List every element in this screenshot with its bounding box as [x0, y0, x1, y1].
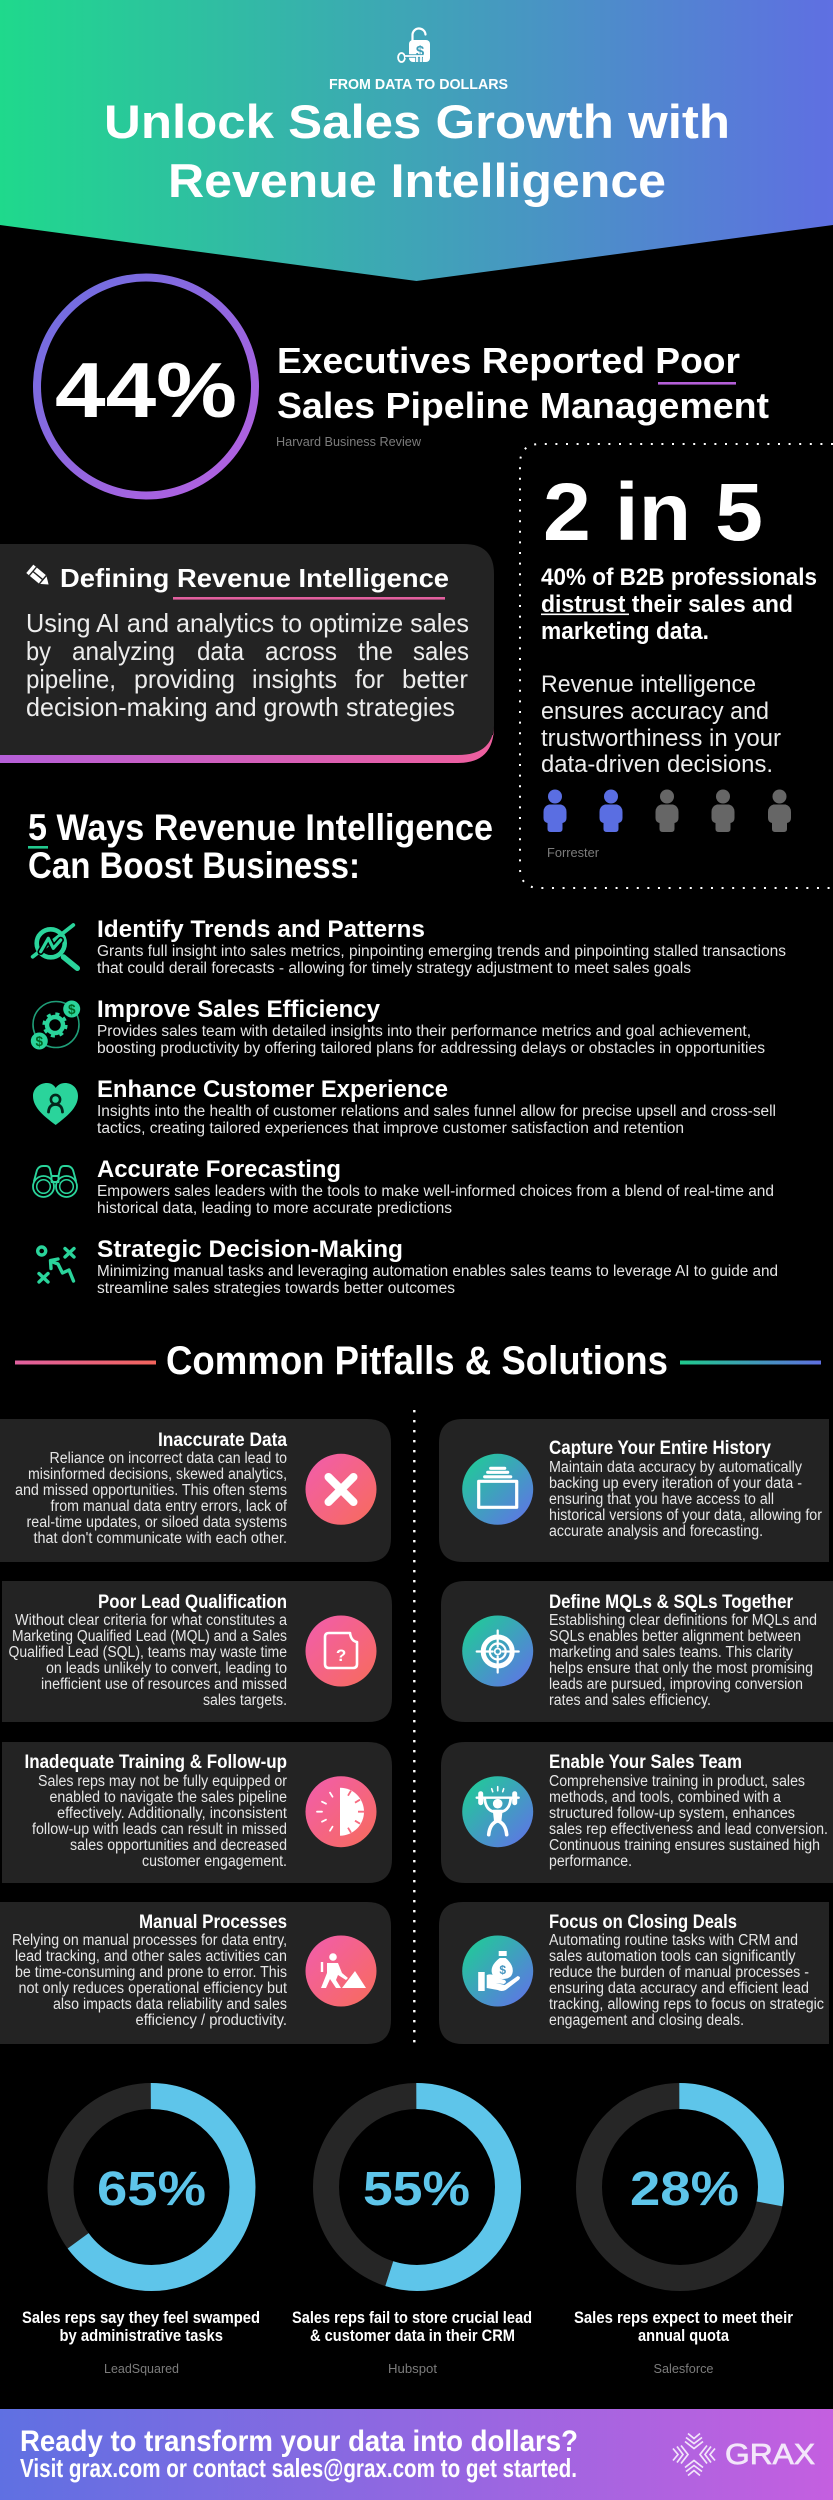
logo: GRAX: GRAX	[725, 2439, 815, 2471]
panel: pitfall inadequate training: customer engagement.	[142, 1853, 287, 1870]
panel: pitfall inadequate training: effectively. Additionally, inconsistent	[57, 1805, 288, 1822]
call to action: Ready to transform your data into dollars?	[20, 2425, 578, 2458]
icon: people pictogram 2 of 5	[544, 790, 791, 832]
icon: worker digging	[306, 1936, 376, 2006]
definition text: Using AI and analytics to optimize sales	[26, 608, 469, 638]
explanation text	[541, 671, 781, 778]
icon: lock and key	[398, 28, 430, 62]
item: sales efficiency	[31, 996, 765, 1057]
chart: donut 28 percent: 28%	[630, 2163, 739, 2216]
item: identify trends: Grants full insight into sales metrics, pinpointing emerging trends and pinpointing stalled transactions	[97, 943, 786, 960]
logo: GRAX	[673, 2434, 815, 2476]
item: forecasting: Empowers sales leaders with the tools to make well-informed choices from a blend of real-time and	[97, 1183, 774, 1200]
definition text: decision-making and growth strategies	[26, 692, 455, 722]
chart: donut 28 percent	[574, 2096, 794, 2376]
icon: target	[462, 1616, 533, 1686]
item: forecasting: Accurate Forecasting	[97, 1156, 341, 1183]
icon: binoculars	[33, 1166, 77, 1197]
panel: pitfall inaccurate data: and missed opportunities. This often stems	[15, 1482, 287, 1499]
chart: donut 55 percent: Sales reps fail to store crucial lead	[292, 2309, 532, 2327]
panel: solution define MQLs and SQLs: marketing and sales teams. This clarity	[549, 1644, 793, 1661]
heading: common pitfalls: Common Pitfalls & Solutions	[166, 1339, 668, 1383]
definition text: analyzing	[72, 636, 175, 666]
item: strategic decisions: Minimizing manual tasks and leveraging automation enables sales teams to leverage AI to guide and	[97, 1263, 778, 1280]
icon: gear with dollar coins: $	[36, 1034, 44, 1049]
icon: document question	[306, 1616, 376, 1686]
title: Revenue Intelligence	[168, 154, 666, 207]
panel: pitfall inaccurate data: from manual data entry errors, lack of	[50, 1498, 288, 1515]
list: 5 ways	[31, 916, 786, 1297]
footer banner	[0, 2409, 833, 2500]
chart: donut 55 percent: & customer data in their CRM	[310, 2327, 515, 2345]
panel: pitfall inaccurate data: Reliance on incorrect data can lead to	[50, 1450, 287, 1467]
panel: solution enable sales team: Comprehensive training in product, sales	[549, 1773, 805, 1790]
chart: donut 28 percent: Salesforce	[654, 2361, 714, 2376]
chart: donut 55 percent: 55%	[363, 2163, 470, 2216]
panel: pitfall inadequate training	[2, 1742, 392, 1883]
icon: money bag in hand: $	[499, 1963, 506, 1977]
stat text: 40% of B2B professionals	[541, 564, 817, 591]
item: identify trends: Identify Trends and Patterns	[97, 916, 425, 943]
panel: solution enable sales team: methods, and tools, combined with a	[549, 1789, 781, 1806]
icon: half clock	[306, 1776, 376, 1847]
call to action: Visit grax.com or contact sales@grax.com to get started.	[20, 2453, 577, 2483]
call to action	[20, 2425, 578, 2483]
panel: pitfall lead qualification: inefficient use of resources and missed	[41, 1676, 287, 1693]
panel: solution capture history: ensuring that you have access to all	[549, 1491, 774, 1508]
panel: solution closing deals: ensuring data accuracy and efficient lead	[549, 1980, 809, 1997]
definition text: for	[355, 664, 384, 694]
panel: solution enable sales team: performance.	[549, 1853, 632, 1870]
explanation text: data-driven decisions.	[541, 751, 773, 778]
panel: solution closing deals: Focus on Closing Deals	[549, 1911, 737, 1933]
definition text: by	[26, 636, 51, 666]
stat: 44 percent ring	[37, 278, 255, 496]
panel: pitfall manual processes: not only reduces operational efficiency but	[18, 1980, 288, 1997]
stat heading: executives: Sales Pipeline Management	[277, 385, 769, 426]
panel: pitfall manual processes: also impacts data reliability and sales	[53, 1996, 287, 2013]
panel: pitfall manual processes: Manual Processes	[139, 1911, 287, 1933]
stat text: distrust their sales and	[541, 591, 793, 618]
item: identify trends	[33, 916, 786, 977]
item: sales efficiency: boosting productivity by offering tailored plans for addressing delays or obstacles in opportunities	[97, 1040, 765, 1057]
panel: solution define MQLs and SQLs	[441, 1581, 833, 1722]
panel: pitfall manual processes	[0, 1902, 391, 2044]
chart: donut 28 percent: annual quota	[638, 2327, 730, 2345]
panel: solution enable sales team: Enable Your Sales Team	[549, 1751, 742, 1773]
title: Unlock Sales Growth with	[104, 95, 730, 148]
title	[104, 95, 730, 207]
icon: gear with dollar coins: $	[68, 1002, 76, 1017]
panel: pitfall manual processes: efficiency / productivity.	[136, 2012, 287, 2029]
panel: solution enable sales team	[441, 1742, 833, 1883]
definition text: across	[265, 636, 337, 666]
stat heading: executives: Executives Reported Poor	[277, 340, 740, 381]
panel: solution define MQLs and SQLs: SQLs enables better alignment between	[549, 1628, 801, 1645]
chart: donut 55 percent	[292, 2096, 532, 2376]
panel: pitfall lead qualification: Without clear criteria for what constitutes a	[15, 1612, 287, 1629]
explanation text: Revenue intelligence	[541, 671, 756, 698]
eyebrow: FROM DATA TO DOLLARS	[329, 76, 508, 93]
definition text: better	[402, 664, 468, 694]
icon: pencil	[26, 565, 52, 589]
chart: donut 65 percent: Sales reps say they feel swamped	[22, 2309, 260, 2327]
panel: pitfall inaccurate data: that don't communicate with each other.	[34, 1530, 287, 1547]
panel: solution enable sales team: structured follow-up system, enhances	[549, 1805, 795, 1822]
panel: pitfall inadequate training: Sales reps may not be fully equipped or	[38, 1773, 287, 1790]
panel: solution closing deals: reduce the burden of manual processes -	[549, 1964, 809, 1981]
panel: solution define MQLs and SQLs: leads are pursued, improving conversion	[549, 1676, 803, 1693]
panel: solution capture history	[439, 1419, 829, 1562]
definition text	[26, 608, 469, 722]
icon: weightlifter	[462, 1776, 533, 1847]
heading: 5 ways: 5 Ways Revenue Intelligence	[28, 807, 493, 848]
panel: pitfall lead qualification: Qualified Lead (SQL), teams may waste time	[8, 1644, 287, 1661]
chart: donut 65 percent: LeadSquared	[104, 2361, 179, 2376]
panel: solution capture history: accurate analysis and forecasting.	[549, 1523, 763, 1540]
icon: heart with person	[33, 1083, 78, 1125]
panel heading: Defining Revenue Intelligence	[60, 563, 449, 593]
panel: pitfall inadequate training: sales opportunities and decreased	[70, 1837, 287, 1854]
stat heading: executives	[276, 340, 769, 449]
item: forecasting	[33, 1156, 774, 1217]
icon: document question: ?	[336, 1646, 346, 1665]
panel: solution define MQLs and SQLs: rates and sales efficiency.	[549, 1692, 711, 1709]
panel: 2 in 5	[520, 444, 833, 888]
item: customer experience: tactics, creating tailored experiences that improve customer satisfaction and retention	[97, 1120, 684, 1137]
panel: solution closing deals: sales automation tools can significantly	[549, 1948, 796, 1965]
chart: donut 55 percent: Hubspot	[388, 2361, 437, 2376]
stat text: marketing data.	[541, 618, 709, 645]
definition text: insights	[252, 664, 337, 694]
panel: pitfall inaccurate data	[0, 1419, 391, 1562]
icon: money bag in hand	[462, 1936, 533, 2006]
item: strategic decisions: Strategic Decision-Making	[97, 1236, 403, 1263]
panel: solution closing deals: engagement and closing deals.	[549, 2012, 744, 2029]
item: strategic decisions	[38, 1236, 778, 1297]
panel: solution capture history: backing up every iteration of your data -	[549, 1475, 802, 1492]
item: customer experience: Insights into the health of customer relations and sales funnel allow for precise upsell and cross-sell	[97, 1103, 776, 1120]
panel: pitfall manual processes: Relying on manual processes for data entry,	[12, 1932, 287, 1949]
stat: 44 percent ring: 44%	[55, 346, 237, 434]
panel: pitfall inadequate training: enabled to navigate the sales pipeline	[50, 1789, 287, 1806]
panel: pitfall lead qualification: Poor Lead Qualification	[98, 1591, 287, 1613]
panel: 2 in 5: Forrester	[547, 845, 600, 860]
panel: solution define MQLs and SQLs: helps ensure that only the most promising	[549, 1660, 813, 1677]
icon: play diagram	[38, 1247, 74, 1282]
panel: pitfall lead qualification	[2, 1581, 392, 1722]
panel: solution capture history: Maintain data accuracy by automatically	[549, 1459, 802, 1476]
heading: 5 ways	[28, 807, 493, 886]
icon: lock and key: $	[416, 43, 425, 60]
definition text: sales	[413, 636, 469, 666]
panel: defining revenue intelligence	[0, 544, 494, 763]
header banner	[0, 0, 833, 281]
panel: pitfall lead qualification: sales targets.	[203, 1692, 287, 1709]
panel: pitfall lead qualification: on leads unlikely to convert, leading to	[46, 1660, 287, 1677]
item: customer experience	[33, 1076, 776, 1137]
panel: pitfall inaccurate data: Inaccurate Data	[158, 1429, 287, 1451]
panel: pitfall manual processes: lead tracking, and other sales activities can	[15, 1948, 287, 1965]
chart: donut 28 percent: Sales reps expect to meet their	[574, 2309, 794, 2327]
chart: donut 65 percent	[22, 2096, 260, 2376]
item: sales efficiency: Improve Sales Efficiency	[97, 996, 380, 1023]
stat heading: executives: Harvard Business Review	[276, 434, 422, 449]
panel: pitfall inaccurate data: real-time updates, or siloed data systems	[26, 1514, 287, 1531]
heading: common pitfalls	[15, 1339, 821, 1383]
panel: solution define MQLs and SQLs: Define MQLs & SQLs Together	[549, 1591, 793, 1613]
panel: solution closing deals	[439, 1902, 829, 2044]
panel: pitfall manual processes: be time-consuming and prone to error. This	[15, 1964, 287, 1981]
item: sales efficiency: Provides sales team with detailed insights into their performance metrics and goal achievement,	[97, 1023, 751, 1040]
panel: pitfall lead qualification: Marketing Qualified Lead (MQL) and a Sales	[12, 1628, 287, 1645]
explanation text: trustworthiness in your	[541, 725, 781, 752]
item: forecasting: historical data, leading to more accurate predictions	[97, 1200, 452, 1217]
item: identify trends: that could derail forecasts - allowing for timely strategy adjustment to meet sales goals	[97, 960, 691, 977]
panel: solution closing deals: Automating routine tasks with CRM and	[549, 1932, 798, 1949]
item: customer experience: Enhance Customer Experience	[97, 1076, 448, 1103]
chart: donut 65 percent: by administrative tasks	[60, 2327, 223, 2345]
definition text: providing	[134, 664, 235, 694]
icon: x	[306, 1454, 376, 1525]
definition text: pipeline,	[26, 664, 116, 694]
panel: solution capture history: Capture Your Entire History	[549, 1437, 771, 1459]
definition text: the	[358, 636, 393, 666]
panel: 2 in 5: 2 in 5	[543, 467, 763, 558]
heading: 5 ways: Can Boost Business:	[28, 845, 360, 886]
panel: pitfall inadequate training: Inadequate Training & Follow-up	[24, 1751, 287, 1773]
panel: pitfall inadequate training: follow-up with leads can result in missed	[32, 1821, 287, 1838]
chart: donut 65 percent: 65%	[97, 2163, 206, 2216]
icon: archive stack	[462, 1454, 533, 1525]
icon: magnifier with trend line	[33, 925, 77, 968]
icon: gear with dollar coins	[31, 1000, 80, 1050]
stat text	[541, 564, 817, 645]
panel: pitfall inaccurate data: misinformed decisions, skewed analytics,	[28, 1466, 287, 1483]
explanation text: ensures accuracy and	[541, 698, 769, 725]
item: strategic decisions: streamline sales strategies towards better outcomes	[97, 1280, 455, 1297]
definition text: data	[197, 636, 244, 666]
